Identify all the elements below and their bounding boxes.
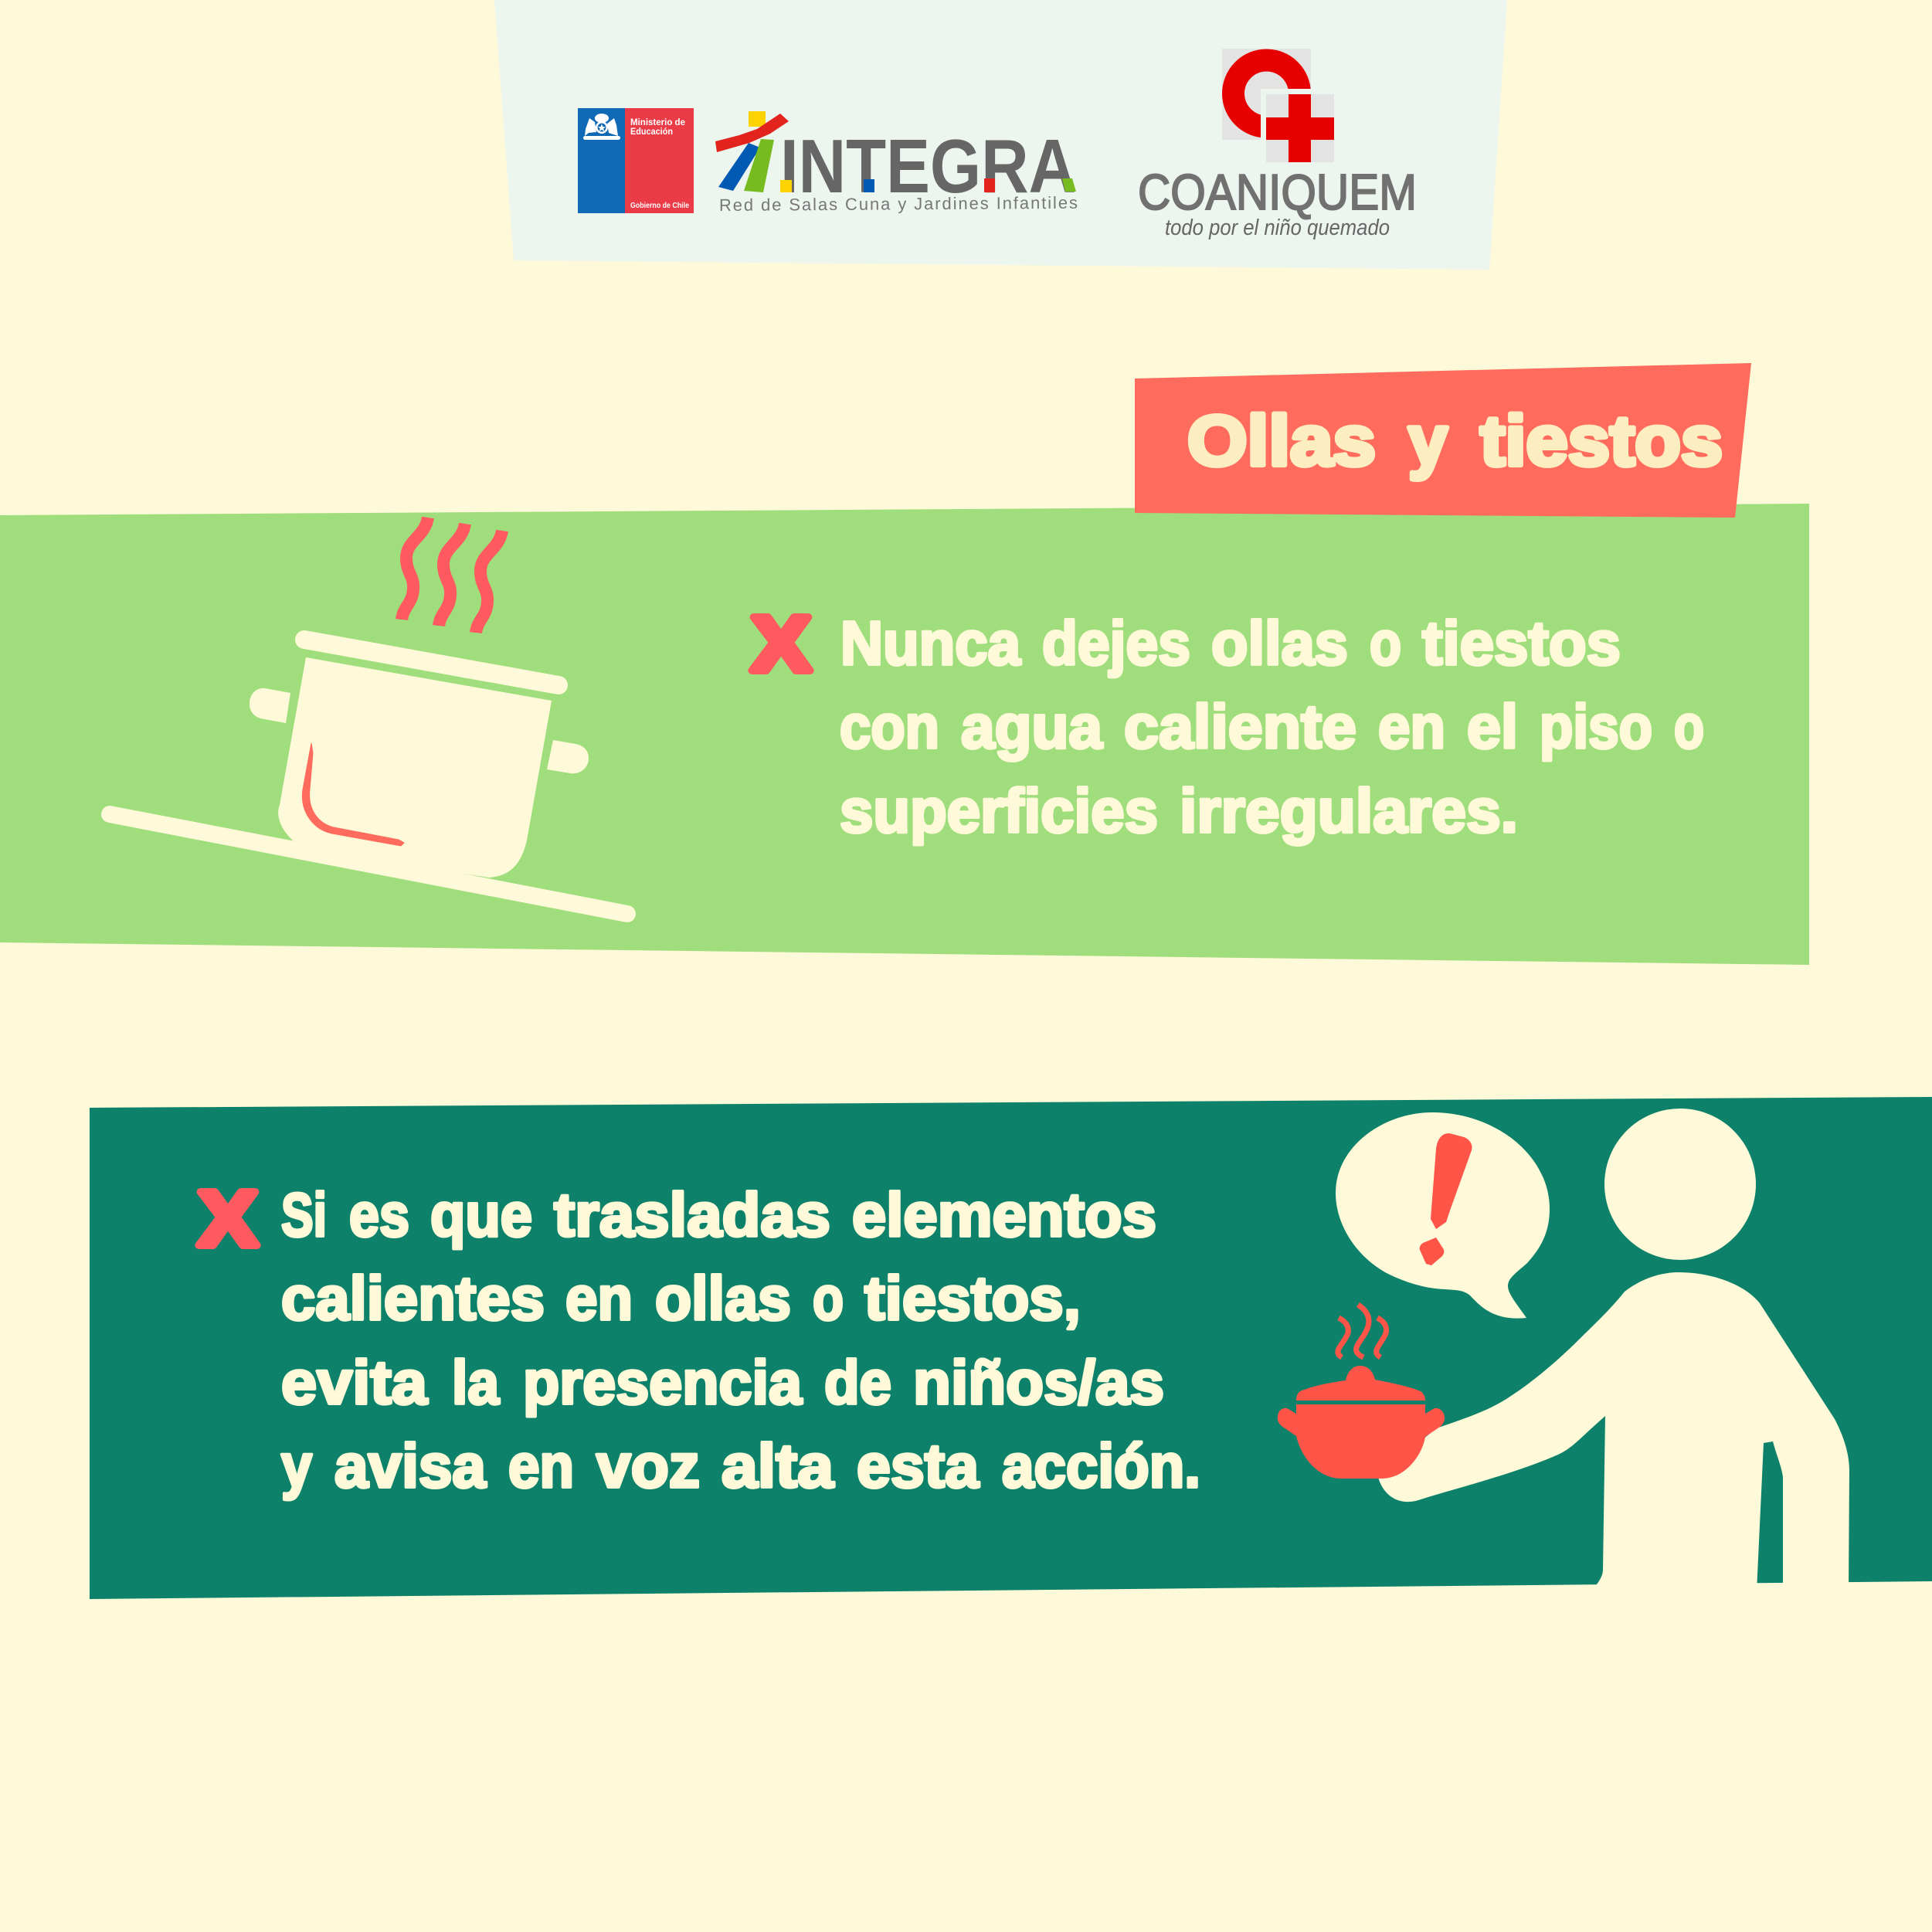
text: warning two: evita — [281, 1348, 428, 1417]
text: warning two: en — [565, 1264, 633, 1333]
pot highlight — [302, 743, 404, 846]
text: warning one: superficies — [840, 776, 1158, 845]
panel: green warning — [0, 504, 1809, 965]
mark: X: X — [199, 1176, 257, 1262]
text: warning one: piso — [1540, 692, 1652, 761]
ministry name second line: Educación — [630, 126, 673, 137]
text: warning two: de — [824, 1348, 891, 1417]
icon: crest — [583, 114, 620, 140]
text: warning two: acción. — [1002, 1431, 1200, 1500]
text: warning two: es — [349, 1180, 409, 1249]
text: warning two: alta — [722, 1431, 834, 1500]
text: warning two: en — [508, 1431, 574, 1500]
steam — [402, 518, 502, 633]
speech bubble — [1336, 1112, 1550, 1319]
text: warning one: o — [1370, 609, 1401, 677]
text: warning one: caliente — [1124, 692, 1356, 761]
body and arm — [1378, 1272, 1849, 1591]
text: warning two: que — [430, 1180, 532, 1249]
title — [1187, 402, 1723, 480]
right handle — [547, 740, 589, 773]
text: warning two: trasladas — [554, 1180, 830, 1249]
text: warning two: Si — [281, 1180, 327, 1249]
text: warning one: en — [1378, 692, 1445, 761]
text: warning one: ollas — [1211, 609, 1348, 677]
tagline: todo por el niño quemado — [1165, 216, 1390, 240]
text: warning one: con — [840, 692, 939, 761]
panel: logo header — [494, 0, 1507, 270]
government label: Gobierno de Chile — [630, 201, 689, 210]
ministry name: Ministerio de — [630, 117, 685, 127]
head — [1604, 1109, 1756, 1260]
text: warning one: agua — [961, 692, 1102, 761]
text: warning two: o — [813, 1264, 844, 1333]
text: warning two: esta — [857, 1431, 979, 1500]
title: tiestos — [1480, 402, 1723, 480]
panel: dark green warning — [90, 1097, 1932, 1599]
text: warning two: niños/as — [913, 1348, 1164, 1417]
icon: person carrying pot — [1278, 1109, 1849, 1591]
left handle — [250, 688, 290, 723]
text: warning one: irregulares. — [1180, 776, 1518, 845]
text: warning two: presencia — [523, 1348, 802, 1417]
text: warning two: calientes — [281, 1264, 545, 1333]
pot — [1278, 1305, 1445, 1479]
icon: tilted pot with steam — [110, 518, 627, 914]
sloped surface — [110, 814, 627, 914]
text: warning one: dejes — [1042, 609, 1190, 677]
text: warning two: avisa — [334, 1431, 486, 1500]
wordmark: INTEGRA — [780, 124, 1076, 209]
pot steam — [1338, 1305, 1387, 1357]
text: warning two: elementos — [852, 1180, 1156, 1249]
pot body — [278, 657, 552, 878]
text: warning one: o — [1674, 692, 1704, 761]
text: warning two: la — [452, 1348, 499, 1417]
text: warning one: tiestos — [1422, 609, 1621, 677]
text: warning one — [840, 609, 1704, 845]
text: warning two: ollas — [655, 1264, 791, 1333]
text: warning two — [281, 1180, 1200, 1500]
text: warning two: tiestos, — [864, 1264, 1081, 1333]
logo: Integra — [715, 111, 1078, 215]
tagline: Red de Salas Cuna y Jardines Infantiles — [719, 193, 1078, 215]
panel: title banner — [1135, 363, 1751, 518]
wordmark: COANIQUEM — [1138, 164, 1417, 220]
text: warning one: Nunca — [840, 609, 1020, 677]
text: warning two: y — [281, 1431, 312, 1500]
logo: Ministerio de Educación — [578, 108, 694, 213]
text: warning one: el — [1467, 692, 1518, 761]
exclamation mark — [1420, 1133, 1472, 1265]
title: Ollas — [1187, 402, 1376, 480]
text: warning two: voz — [596, 1431, 700, 1500]
logo: Coaniquem — [1138, 49, 1417, 240]
pot lid — [304, 640, 559, 685]
title: y — [1408, 402, 1448, 480]
mark: X: X — [752, 601, 810, 688]
